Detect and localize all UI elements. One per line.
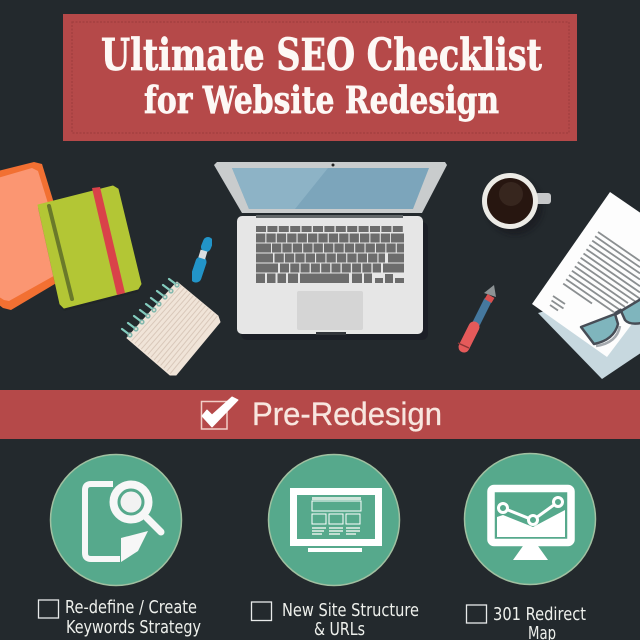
section heading: Pre-Redesign bbox=[252, 396, 442, 432]
illustration: USB drive bbox=[196, 242, 208, 277]
illustration: fountain pen bbox=[458, 285, 496, 348]
illustration: laptop bbox=[214, 162, 447, 340]
illustration: documents and glasses bbox=[532, 192, 640, 379]
item 1: checkbox bbox=[38, 600, 58, 618]
section banner: pre-redesign bbox=[0, 390, 640, 439]
glasses bbox=[581, 296, 640, 346]
illustration: spiral notepad bbox=[122, 279, 220, 375]
item 3: label bbox=[493, 605, 586, 640]
title line 2: for Website Redesign bbox=[144, 78, 499, 122]
trackpad bbox=[297, 291, 363, 330]
item 2: label: New Site Structure bbox=[282, 601, 419, 621]
item 3: label: 301 Redirect bbox=[493, 605, 586, 625]
item 2: site structure icon bbox=[268, 454, 400, 586]
laptop base bbox=[237, 216, 423, 334]
laptop lid bbox=[214, 162, 447, 213]
item 1: label bbox=[65, 598, 201, 638]
illustration: green notebook bbox=[38, 186, 141, 311]
item 1: label: Keywords Strategy bbox=[66, 618, 201, 638]
item 3: checkbox bbox=[466, 605, 486, 623]
item 1: keywords strategy icon bbox=[50, 454, 182, 586]
illustration: coffee cup bbox=[482, 173, 551, 235]
title banner bbox=[63, 14, 577, 141]
illustration: orange folder bbox=[0, 162, 75, 310]
item 2: label: & URLs bbox=[314, 620, 365, 640]
keyboard bbox=[256, 229, 404, 283]
checkbox icon bbox=[202, 397, 238, 429]
item 3: redirect map icon bbox=[464, 454, 596, 584]
item 2: checkbox bbox=[252, 602, 272, 620]
item 1: label: Re-define / Create bbox=[65, 598, 197, 618]
item 2: label bbox=[282, 601, 419, 640]
